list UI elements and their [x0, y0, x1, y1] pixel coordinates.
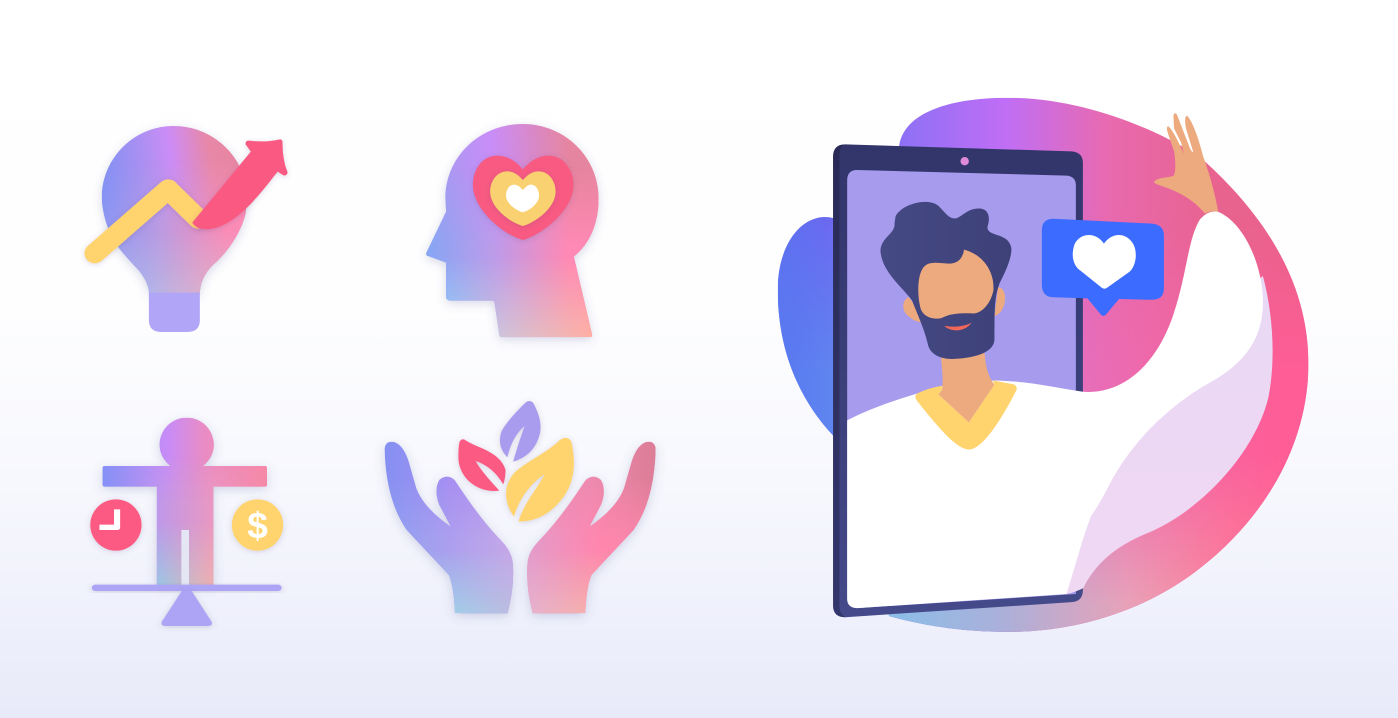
- right hand: [525, 442, 656, 614]
- neck: [938, 353, 994, 423]
- purple leaf: [500, 401, 541, 462]
- tablet body: [833, 144, 1083, 617]
- face: [918, 250, 994, 319]
- bulb base: [149, 293, 200, 332]
- mouth: [944, 323, 972, 330]
- scale beam: [92, 585, 282, 591]
- red leaf: [458, 439, 506, 491]
- person silhouette: [103, 418, 267, 585]
- speech bubble: [1042, 219, 1164, 316]
- coin disc: [232, 499, 283, 551]
- yellow leaf: [506, 438, 574, 522]
- hair and beard: [880, 202, 1011, 359]
- clock hands: [99, 509, 120, 530]
- white shirt: [847, 211, 1263, 608]
- bulb glass: [102, 126, 247, 293]
- illustration: man waving from tablet: [778, 98, 1308, 632]
- scale pivot: [162, 591, 212, 626]
- gradient blob: [778, 98, 1308, 632]
- icon: light bulb with growth arrow: [95, 126, 288, 332]
- inner white heart: [506, 185, 539, 212]
- yellow collar: [915, 380, 1017, 450]
- outer red heart: [473, 156, 574, 240]
- icon: hands holding leaves: [385, 401, 656, 614]
- tablet left edge shading: [833, 144, 845, 617]
- icon: person balancing time and money: [90, 418, 283, 626]
- sleeve shadow: [1016, 276, 1273, 594]
- head silhouette: [426, 124, 599, 337]
- man's ears: [903, 287, 1005, 322]
- dollar sign: $: [247, 505, 268, 546]
- middle yellow heart: [490, 171, 556, 226]
- tablet screen: [847, 170, 1076, 608]
- clock disc: [90, 499, 142, 551]
- yellow trend line: [95, 189, 198, 253]
- leg gap: [181, 530, 189, 585]
- camera dot: [960, 157, 969, 165]
- hand: [1154, 113, 1218, 213]
- icon: head with heart: [426, 124, 599, 337]
- white heart in bubble: [1073, 235, 1136, 289]
- red arrow: [192, 139, 288, 229]
- left hand: [385, 442, 515, 614]
